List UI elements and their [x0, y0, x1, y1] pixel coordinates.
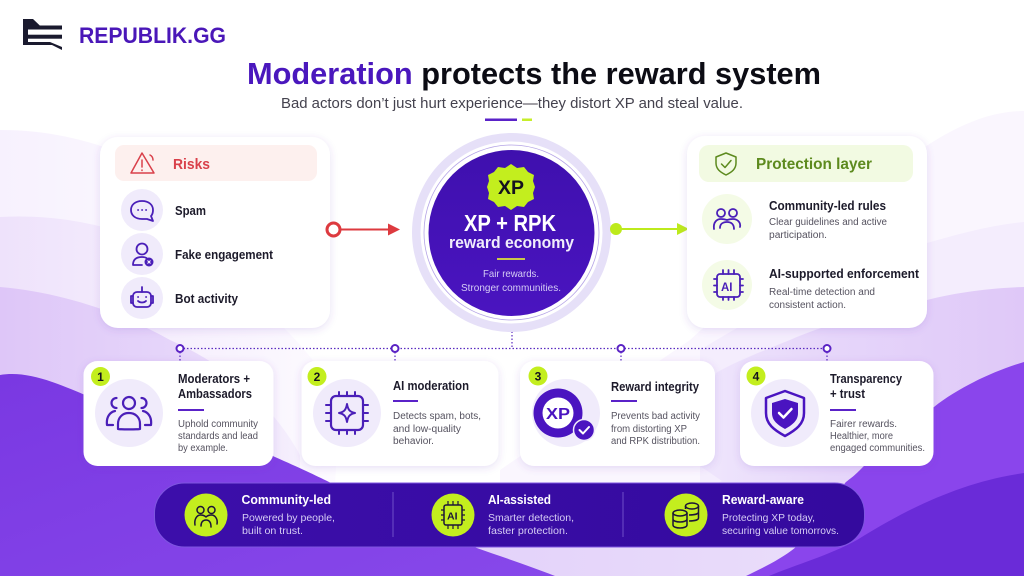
card 3: reward integrity: Reward integrity	[611, 380, 699, 394]
item: community-led: Community-led	[242, 493, 331, 507]
card 4: transparency + trust: engaged communities.	[830, 443, 925, 454]
logo mark	[23, 19, 62, 50]
protection: AI-supported enforcement: Real-time detection and	[769, 287, 875, 298]
item: AI-assisted	[432, 493, 574, 537]
badge 1: 1	[97, 370, 104, 384]
card 2: AI moderation	[302, 361, 498, 466]
risk: spam: Spam	[175, 204, 206, 218]
card 1: moderators + ambassadors	[84, 361, 274, 466]
icon: XP seal: XP	[546, 406, 570, 423]
badge 1	[91, 367, 110, 386]
item: reward-aware	[664, 493, 839, 537]
card 1: moderators + ambassadors: by example.	[178, 443, 228, 454]
card 4: transparency + trust: Fairer rewards.	[830, 419, 897, 430]
card 1: moderators + ambassadors: standards and lead	[178, 431, 258, 442]
hub title: XP + RPK	[464, 210, 556, 236]
protection header	[699, 145, 913, 182]
protection: community-led rules: Clear guidelines and active	[769, 217, 887, 228]
XP badge: XP	[498, 178, 524, 199]
risks heading: Risks	[173, 156, 210, 173]
card 2: AI moderation: AI moderation	[393, 379, 469, 393]
risk: bot activity	[121, 277, 238, 319]
card 4: transparency + trust: Transparency	[830, 372, 902, 386]
protection: community-led rules: Community-led rules	[769, 199, 886, 213]
risk: spam	[121, 189, 206, 231]
badge 4	[746, 366, 766, 386]
card 2: AI moderation: Detects spam, bots,	[393, 411, 481, 422]
item: AI-assisted: AI-assisted	[488, 493, 551, 507]
protection: AI-supported enforcement: AI-supported enforcement	[769, 267, 920, 281]
item: community-led: Powered by people,	[242, 512, 335, 524]
hub: XP + RPK reward economy	[412, 133, 611, 332]
title: Moderation protects the reward system	[247, 56, 821, 91]
badge 4: 4	[753, 370, 760, 384]
card 1: moderators + ambassadors: Uphold community	[178, 419, 258, 430]
item: AI-assisted: faster protection.	[488, 525, 568, 537]
badge 2	[308, 367, 326, 386]
risk: bot activity: Bot activity	[175, 292, 238, 306]
risk: fake engagement	[121, 233, 274, 275]
protection heading: Protection layer	[756, 156, 872, 173]
item: AI-assisted: Smarter detection,	[488, 512, 574, 524]
badge 3	[528, 366, 548, 386]
item: reward-aware: securing value tomorrovs.	[722, 525, 839, 537]
card 2: AI moderation: behavior.	[393, 436, 434, 447]
icon: shield	[716, 153, 736, 175]
risks header	[115, 145, 317, 181]
icon: shield	[751, 379, 819, 447]
item: community-led: built on trust.	[242, 525, 303, 537]
risk: fake engagement: Fake engagement	[175, 248, 274, 262]
connector lines	[176, 328, 830, 361]
summary bar	[154, 483, 864, 547]
protection: community-led rules: participation.	[769, 230, 827, 241]
panel: protection layer	[687, 136, 927, 328]
title accent	[485, 118, 532, 121]
card 3: reward integrity: and RPK distribution.	[611, 436, 700, 447]
arrow: economy to protection	[610, 223, 689, 235]
icon: chip with spark	[313, 379, 381, 447]
item: reward-aware: Protecting XP today,	[722, 512, 815, 524]
card 3: reward integrity: Prevents bad activity	[611, 411, 700, 422]
hub tagline: Fair rewards.	[483, 268, 539, 280]
panel: risks	[100, 137, 330, 328]
card 3: reward integrity	[520, 361, 715, 466]
card 4: transparency + trust	[740, 361, 934, 466]
item: reward-aware: Reward-aware	[722, 493, 804, 507]
protection: AI-supported enforcement: AI	[721, 282, 732, 294]
card 1: moderators + ambassadors: Moderators +	[178, 372, 250, 386]
card 4: transparency + trust: Healthier, more	[830, 431, 893, 442]
protection: AI-supported enforcement	[702, 260, 920, 311]
logo	[23, 19, 226, 50]
subtitle: Bad actors don’t just hurt experience—they distort XP and steal value.	[281, 96, 743, 112]
arrow: risks to economy	[327, 223, 400, 236]
item: community-led	[184, 493, 335, 537]
hub subtitle: reward economy	[449, 234, 575, 252]
item: AI-assisted: AI	[447, 510, 458, 522]
badge 3: 3	[535, 370, 542, 384]
card 4: transparency + trust: + trust	[830, 387, 866, 401]
icon: people	[95, 379, 163, 447]
hub tagline: Stronger communities.	[461, 282, 561, 294]
card 1: moderators + ambassadors: Ambassadors	[178, 387, 252, 401]
protection: community-led rules	[702, 194, 887, 244]
badge 2: 2	[314, 370, 321, 384]
XP badge	[487, 164, 535, 210]
card 3: reward integrity: from distorting XP	[611, 424, 687, 435]
icon: warning triangle	[131, 153, 154, 173]
card 2: AI moderation: and low-quality	[393, 424, 461, 435]
logo wordmark: REPUBLIK.GG	[79, 23, 226, 48]
hub tagline	[461, 268, 561, 294]
icon: XP seal	[532, 379, 600, 447]
protection: AI-supported enforcement: consistent action.	[769, 300, 846, 311]
